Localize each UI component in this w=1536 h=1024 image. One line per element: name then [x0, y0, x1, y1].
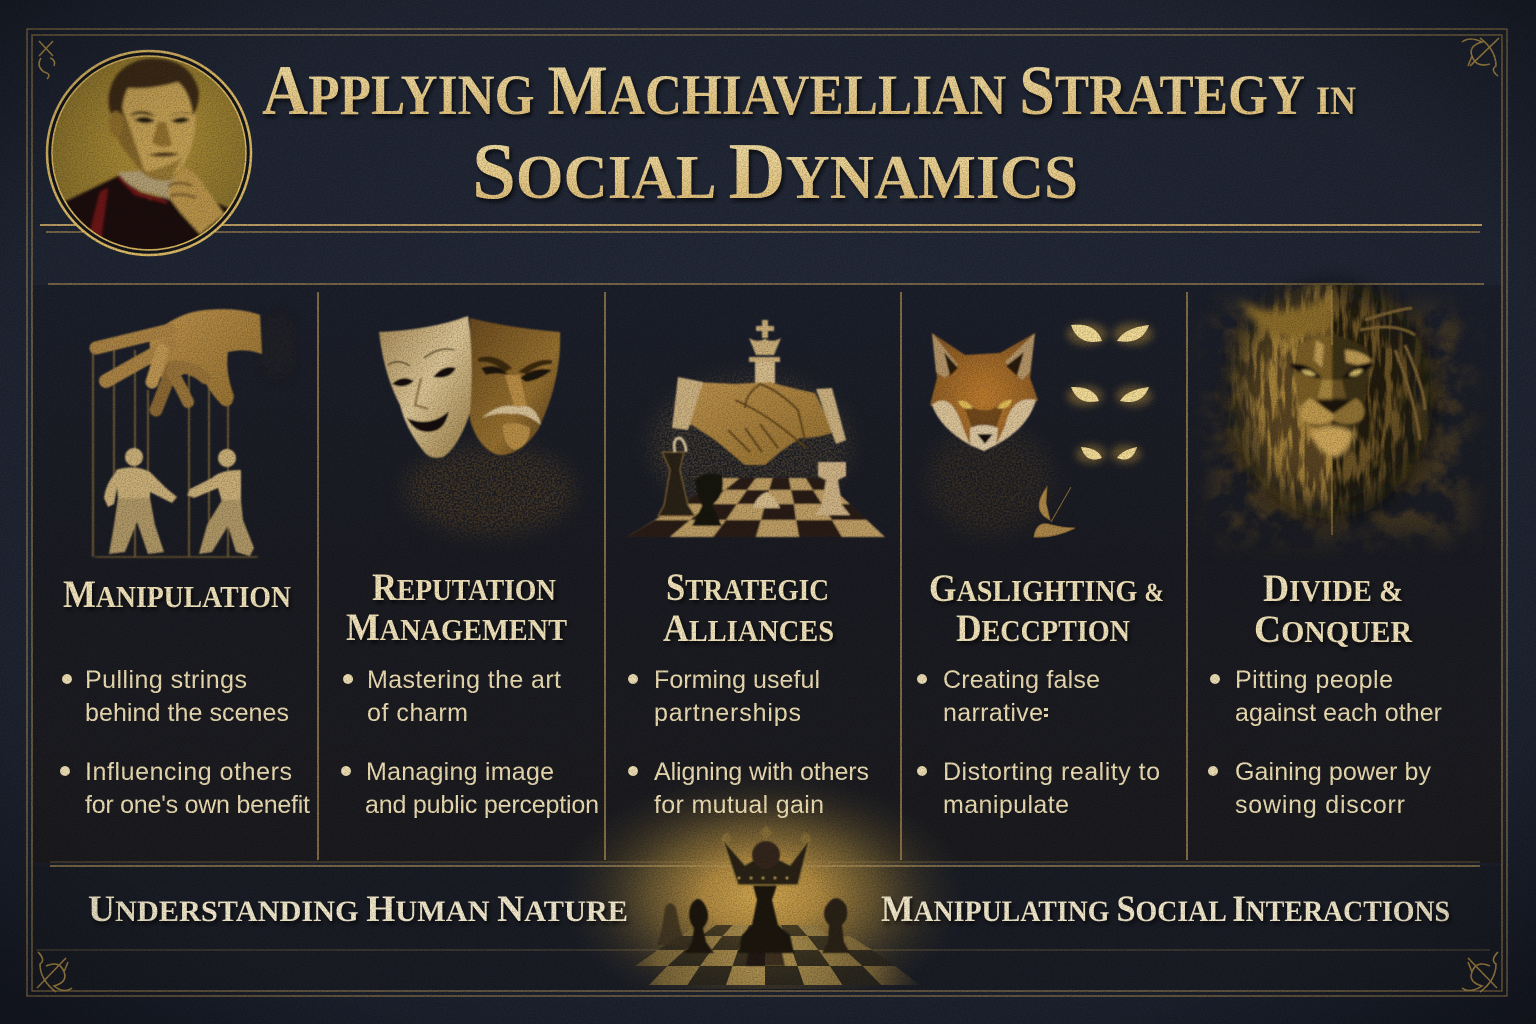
title: SOCIAL DYNAMICS: [472, 128, 1078, 216]
portrait figure: [60, 59, 232, 260]
bullets: manipulate: [943, 791, 1069, 819]
bullets: sowing discorr: [1235, 791, 1405, 819]
bullets: Creating false: [943, 666, 1100, 694]
bullets: narrative: [943, 699, 1043, 727]
icon: lion half light half dark: [1215, 287, 1465, 535]
puppet right: [187, 449, 254, 556]
content panel backdrop: [33, 285, 1502, 863]
bullets: [917, 666, 1160, 819]
pieces: [657, 825, 850, 966]
bullets: against each other: [1235, 699, 1442, 727]
bullets: Pulling strings: [85, 666, 247, 694]
heading: manipulation: MANIPULATION: [63, 573, 291, 616]
heading: reputation management: REPUTATION: [372, 566, 556, 609]
hands: [672, 382, 834, 465]
dust backdrop: [1215, 310, 1465, 535]
footer left label: UNDERSTANDING HUMAN NATURE: [88, 889, 628, 930]
column 2: reputation management: [341, 316, 599, 819]
heading: gaslighting and deception: [929, 567, 1164, 650]
column 3: strategic alliances: [627, 320, 885, 819]
bullets: [60, 666, 310, 819]
bullets: partnerships: [654, 699, 801, 727]
bullets: [341, 666, 599, 819]
bullets: [628, 666, 869, 819]
falling leaf: [1034, 487, 1075, 537]
footer right label: MANIPULATING SOCIAL INTERACTIONS: [881, 889, 1450, 930]
bullets: Forming useful: [654, 666, 820, 694]
title: [262, 52, 1356, 216]
bullets: for one's own benefit: [85, 791, 310, 819]
bullets: behind the scenes: [85, 699, 289, 727]
bullets: Gaining power by: [1235, 758, 1432, 786]
crown: [722, 838, 810, 885]
bullets: for mutual gain: [654, 791, 824, 819]
bullets: Influencing others: [85, 758, 292, 786]
icon: theatre masks: [379, 316, 575, 535]
heading: gaslighting and deception: GASLIGHTING &: [929, 567, 1164, 610]
footer glow: [580, 784, 945, 989]
board: [627, 478, 885, 537]
column 1: manipulation: [60, 309, 310, 819]
title: APPLYING MACHIAVELLIAN STRATEGY IN: [262, 52, 1356, 130]
icon: handshake and chessboard: [627, 320, 885, 537]
checkerboard: [635, 925, 920, 985]
gold ring: [47, 51, 251, 255]
lion face: [1290, 335, 1374, 458]
mane: [1221, 285, 1332, 524]
heading: reputation management: [346, 566, 567, 649]
heading: divide and conquer: CONQUER: [1254, 608, 1413, 651]
column 5: divide and conquer: [1208, 287, 1465, 819]
glowing eyes: [1067, 323, 1153, 463]
bullets: Aligning with others: [654, 758, 869, 786]
chess pieces: [658, 452, 695, 516]
footer emblem: crown and chess pieces: [635, 825, 920, 985]
heading: strategic alliances: [663, 566, 834, 650]
heading: strategic alliances: ALLIANCES: [663, 607, 834, 650]
heading: strategic alliances: STRATEGIC: [666, 566, 829, 609]
portrait medallion: [47, 51, 251, 260]
bullets: and public perception: [365, 791, 599, 819]
bullets: Managing image: [366, 758, 554, 786]
bullets: Pitting people: [1235, 666, 1393, 694]
queen body: [738, 885, 794, 953]
bullets: of charm: [367, 699, 468, 727]
fox: [930, 333, 1038, 451]
icon: puppet hand and strings: [93, 309, 292, 557]
bullets: Mastering the art: [367, 666, 561, 694]
king: [749, 320, 781, 383]
heading: reputation management: MANAGEMENT: [346, 606, 567, 649]
heading: gaslighting and deception: DECCPTION: [956, 607, 1130, 650]
column 4: gaslighting and deception: [917, 323, 1164, 819]
bullets: Distorting reality to: [943, 758, 1160, 786]
heading: divide and conquer: [1254, 567, 1413, 651]
icon: fox and glowing eyes: [928, 323, 1153, 537]
footer band backdrop: [33, 866, 1502, 990]
puppet left: [104, 448, 177, 554]
bullets: [1208, 666, 1442, 819]
heading: divide and conquer: DIVIDE &: [1263, 567, 1403, 610]
